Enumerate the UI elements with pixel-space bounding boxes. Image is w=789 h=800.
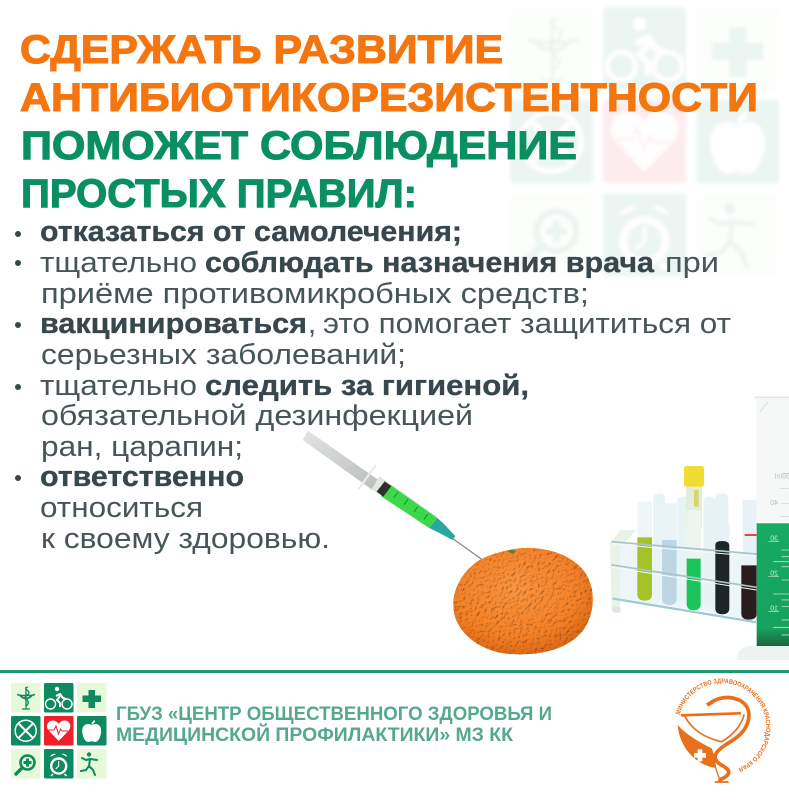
rule 3: vaccination: это помогает защититься от [323, 308, 731, 340]
rule 3: vaccination: , [308, 308, 316, 340]
tube 4 [715, 523, 730, 614]
rule 5: responsibility: ответственно [40, 461, 244, 493]
yellow capped tube [684, 466, 704, 527]
rule 5: responsibility: относиться [40, 492, 203, 524]
title: АНТИБИОТИКОРЕЗИСТЕНТНОСТИ [20, 76, 758, 120]
cylinder scale labels (mirrored): 10 [770, 605, 778, 612]
photo: tangerine [453, 548, 593, 654]
back tubes [653, 493, 728, 607]
title [20, 28, 758, 216]
rule 2: doctor's prescriptions: тщательно [40, 247, 197, 279]
rule 2: doctor's prescriptions [15, 247, 719, 310]
rule 4: hygiene [15, 370, 529, 463]
rule 5: responsibility [15, 461, 330, 555]
tangerine stem [507, 549, 516, 554]
rule 2: doctor's prescriptions: соблюдать назначения врача [205, 247, 655, 279]
cylinder scale labels (mirrored): 20 [770, 571, 778, 578]
rules list [15, 216, 731, 555]
rule 4: hygiene: следить за гигиеной, [205, 370, 529, 402]
footer organisation name [116, 704, 552, 746]
cylinder [737, 397, 789, 660]
rack side [610, 530, 637, 610]
photo: test-tube rack and measuring cylinder [610, 397, 789, 660]
cylinder scale labels (mirrored): 40 [770, 500, 778, 507]
title: СДЕРЖАТЬ РАЗВИТИЕ [20, 28, 503, 72]
emblem ring text: МИНИСТЕРСТВО ЗДРАВООХРАНЕНИЯ КРАСНОДАРСКОГО КРАЯ [676, 678, 771, 772]
rule 3: vaccination [15, 308, 731, 371]
tinted glass behind tubes [620, 542, 757, 620]
cylinder scale labels (mirrored) [770, 473, 789, 612]
footer logo: icon grid [11, 683, 106, 778]
tube 2 [662, 503, 677, 605]
tube 1 [637, 502, 652, 601]
rule 3: vaccination: вакцинироваться [40, 308, 307, 340]
rule 4: hygiene: обязательной дезинфекцией [41, 400, 473, 432]
watermark icon grid [510, 7, 779, 276]
tube 5 [741, 500, 757, 620]
rule 1: self-medication: отказаться от самолечения; [40, 216, 462, 248]
title: ПРОСТЫХ ПРАВИЛ: [21, 172, 417, 216]
tube 3 [687, 510, 701, 610]
rule 3: vaccination: серьезных заболеваний; [41, 339, 406, 371]
rule 5: responsibility: к своему здоровью. [41, 523, 330, 555]
rule 2: doctor's prescriptions: приёме противомикробных средств; [41, 278, 589, 310]
ministry emblem [676, 678, 771, 783]
emblem bowl and serpent [678, 698, 749, 782]
rule 2: doctor's prescriptions: при [665, 247, 719, 279]
cylinder scale labels (mirrored): 30 [770, 536, 778, 543]
rack rails [612, 542, 757, 622]
rule 4: hygiene: тщательно [40, 370, 197, 402]
rule 4: hygiene: ран, царапин; [41, 431, 243, 463]
footer organisation name: ГБУЗ «ЦЕНТР ОБЩЕСТВЕННОГО ЗДОРОВЬЯ И [116, 704, 552, 725]
photo: syringe [303, 431, 485, 562]
title: ПОМОЖЕТ СОБЛЮДЕНИЕ [21, 124, 577, 168]
footer organisation name: МЕДИЦИНСКОЙ ПРОФИЛАКТИКИ» МЗ КК [116, 724, 513, 746]
footer divider [0, 670, 789, 673]
